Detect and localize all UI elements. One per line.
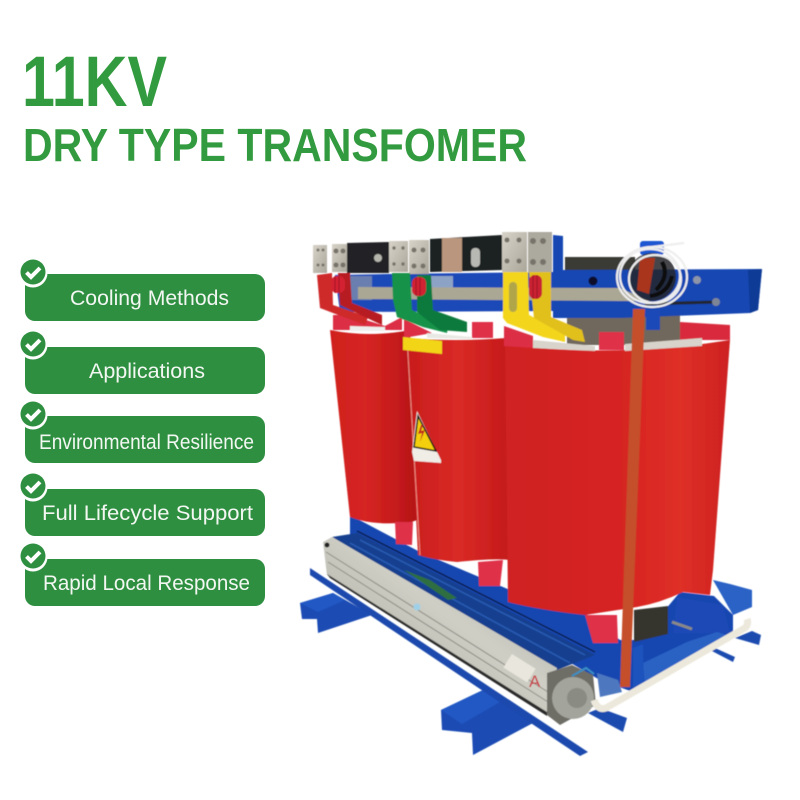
red phase terminals <box>313 244 382 325</box>
feature: environmental resilience: Environmental Resilience <box>39 431 254 454</box>
feature: applications <box>18 330 265 394</box>
illustration: dry type transformer <box>300 232 762 756</box>
orange grounding rod <box>620 309 645 687</box>
title: 11KV: 11KV <box>22 43 167 122</box>
feature: environmental resilience <box>18 400 265 463</box>
green phase terminals <box>389 238 467 333</box>
blue mesh guard over fan <box>332 531 595 670</box>
spacer blocks bottom <box>395 522 618 643</box>
feature: cooling methods: Cooling Methods <box>70 286 229 310</box>
feature: applications: Applications <box>89 359 205 383</box>
cross-flow fan body <box>323 537 557 716</box>
blue lower frame <box>350 515 752 697</box>
black tie bars <box>347 235 502 273</box>
subtitle: dry type transformer: DRY TYPE TRANSFOMER <box>23 119 527 171</box>
yellow phase terminals <box>502 232 585 342</box>
yellow coil label <box>403 337 442 354</box>
fan motor <box>547 665 596 725</box>
coil: middle (green phase) <box>407 338 510 562</box>
feature: cooling methods <box>18 258 265 321</box>
base rails and feet <box>300 568 761 756</box>
feature list <box>18 258 265 606</box>
feature: rapid local response: Rapid Local Response <box>43 571 250 595</box>
plate bolts <box>316 238 546 268</box>
back core <box>565 257 680 345</box>
white conduit pipe <box>594 619 748 709</box>
cross-flow fan body: A <box>529 672 541 691</box>
spacer blocks top <box>333 315 730 351</box>
feature: full lifecycle support <box>18 472 265 536</box>
coil: left (red phase) <box>330 330 417 524</box>
feature: full lifecycle support: Full Lifecycle Support <box>42 501 253 525</box>
top blue beam <box>335 235 762 330</box>
white coil cable <box>617 243 687 307</box>
feature: rapid local response <box>18 542 265 606</box>
coil: right (yellow phase) <box>505 340 730 615</box>
icon: high voltage warning <box>412 411 441 463</box>
